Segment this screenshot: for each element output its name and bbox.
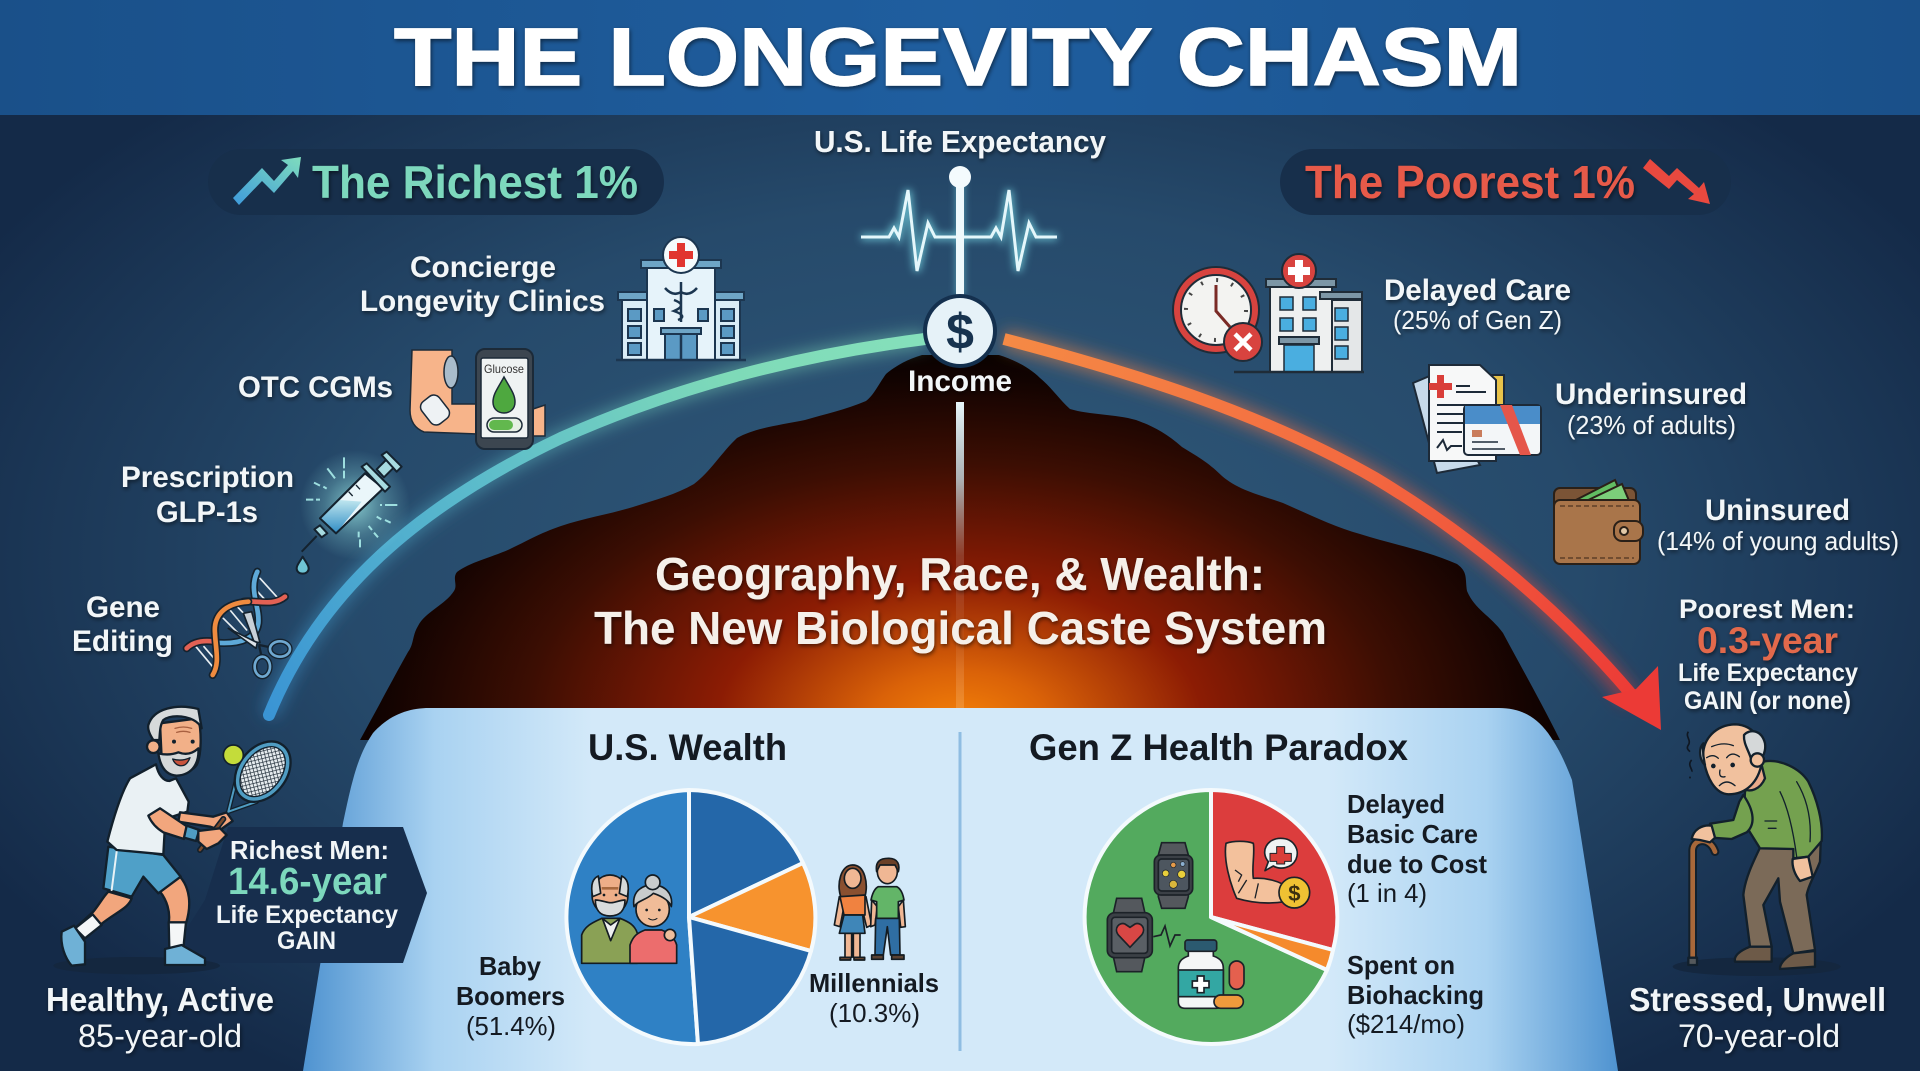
slice: other upper	[689, 790, 803, 917]
callout: poorest men: Life Expectancy	[1678, 659, 1858, 687]
icon: glowing syringe	[297, 450, 410, 574]
icon: income dollar coin	[923, 294, 997, 368]
chasm shape	[360, 355, 1560, 740]
chasm caption: The New Biological Caste System	[594, 602, 1327, 654]
slice: other lower	[689, 917, 811, 1044]
label: gene editing: Editing	[72, 625, 173, 658]
label: spent on biohacking: Biohacking	[1347, 980, 1484, 1010]
icon: clinic hospital	[616, 237, 746, 360]
label: delayed care	[1384, 274, 1571, 335]
panel: lower data panel	[303, 708, 1618, 1071]
hanging hand	[1792, 857, 1813, 881]
icon: clock and hospital	[1173, 254, 1364, 372]
label: spent on biohacking	[1347, 950, 1484, 1039]
pill: poorest	[1280, 149, 1731, 215]
label: spent on biohacking: ($214/mo)	[1347, 1009, 1465, 1039]
neck	[1743, 765, 1765, 790]
label: baby boomers: Baby	[479, 951, 542, 981]
divider	[958, 732, 962, 1051]
label: prescription glp-1s	[121, 461, 294, 529]
label: concierge longevity clinics: Concierge	[410, 251, 556, 284]
heading: u.s. wealth: U.S. Wealth	[588, 727, 787, 768]
heading: gen z health paradox: Gen Z Health Paradox	[1029, 727, 1408, 768]
callout: poorest men: Poorest Men:	[1679, 594, 1855, 624]
label: healthy active: Healthy, Active	[46, 981, 274, 1018]
chasm caption	[594, 548, 1327, 654]
figure: healthy tennis player	[53, 707, 302, 974]
tennis ball	[223, 745, 243, 765]
callout: richest men: Richest Men:	[230, 835, 389, 865]
label: millennials: (10.3%)	[829, 998, 920, 1028]
label: millennials: Millennials	[809, 968, 939, 998]
heading: the richest 1%: The Richest 1%	[312, 156, 638, 208]
label: delayed basic care: Delayed	[1347, 789, 1445, 819]
callout: poorest men	[1678, 594, 1858, 715]
icon: supplement bottle and pills	[1178, 940, 1244, 1008]
label: underinsured: Underinsured	[1555, 378, 1747, 411]
label: delayed basic care: (1 in 4)	[1347, 878, 1427, 908]
label: concierge longevity clinics	[360, 251, 605, 318]
label: delayed basic care: Basic Care	[1347, 819, 1478, 849]
label: uninsured: Uninsured	[1705, 494, 1850, 527]
label: otc cgms: OTC CGMs	[238, 371, 393, 404]
heading: the poorest 1%: The Poorest 1%	[1305, 156, 1635, 208]
back leg	[75, 892, 132, 938]
icon: cgm arm and phone: Glucose	[484, 362, 524, 376]
label: baby boomers: Boomers	[456, 981, 565, 1011]
label: baby boomers: (51.4%)	[466, 1011, 556, 1041]
icon: injured arm with cost: $	[1288, 881, 1300, 906]
chasm caption: Geography, Race, & Wealth:	[655, 548, 1265, 600]
icon: wallet	[1554, 480, 1643, 564]
lower central beam	[956, 402, 964, 710]
label: gene editing: Gene	[86, 591, 160, 624]
shirt	[107, 764, 189, 854]
slice: baby boomers	[566, 790, 698, 1044]
callout: richest men: 14.6-year	[228, 861, 387, 903]
icon: injured arm with cost	[1225, 838, 1310, 908]
icon: boomer couple	[582, 875, 677, 963]
label: concierge longevity clinics: Longevity Clinics	[360, 285, 605, 318]
callout: richest men: GAIN	[277, 927, 336, 955]
label: gene editing	[72, 591, 173, 658]
hand on cane	[1692, 825, 1715, 842]
label: underinsured: (23% of adults)	[1567, 410, 1736, 440]
green rising arc	[269, 339, 925, 715]
shoes	[1735, 947, 1772, 962]
front leg	[160, 877, 189, 923]
icon: heart rate watch	[1107, 898, 1181, 972]
label: millennials	[809, 968, 939, 1028]
callout: poorest men: 0.3-year	[1697, 620, 1838, 661]
label: healthy active	[46, 981, 274, 1054]
head	[1703, 724, 1763, 794]
back arm	[178, 812, 233, 830]
callout: richest men	[165, 827, 427, 963]
front arm	[148, 808, 187, 839]
cane	[1693, 841, 1715, 962]
label: prescription glp-1s: Prescription	[121, 461, 294, 494]
label: underinsured	[1555, 378, 1747, 440]
slice: biohacking majority	[1085, 790, 1327, 1044]
racket frame and handle	[200, 819, 223, 850]
pill: richest	[208, 149, 664, 215]
icon: cgm arm and phone	[410, 349, 545, 449]
label: delayed care: (25% of Gen Z)	[1393, 305, 1562, 335]
icon: income dollar coin: $	[946, 304, 974, 360]
label: delayed basic care: due to Cost	[1347, 849, 1487, 879]
label: healthy active: 85-year-old	[78, 1018, 242, 1054]
heading: u.s. life expectancy: U.S. Life Expectancy	[814, 124, 1107, 159]
icon: heartbeat life line	[861, 166, 1057, 296]
callout: richest men: Life Expectancy	[216, 901, 398, 929]
icon: dna and scissors	[187, 572, 290, 677]
label: spent on biohacking: Spent on	[1347, 950, 1455, 980]
label: stressed unwell: Stressed, Unwell	[1629, 981, 1886, 1018]
slice: delayed care	[1211, 790, 1337, 950]
label: stressed unwell: 70-year-old	[1678, 1018, 1840, 1054]
icon: smartwatch apps	[1154, 843, 1193, 908]
sweater torso	[1743, 761, 1822, 858]
label: delayed care: Delayed Care	[1384, 274, 1571, 307]
icon: millennial couple	[834, 858, 905, 960]
slice: millennials	[689, 863, 815, 951]
red falling arc with arrow	[1004, 339, 1661, 730]
label: baby boomers	[456, 951, 565, 1041]
chart: gen z health pie	[1085, 790, 1337, 1044]
figure: stressed elderly man	[1673, 724, 1841, 976]
shorts	[103, 847, 181, 897]
chart: u.s. wealth pie	[566, 790, 815, 1044]
arm on cane	[1710, 795, 1753, 839]
label: stressed unwell	[1629, 981, 1886, 1054]
icon: insurance papers and card	[1413, 365, 1541, 473]
header banner	[0, 0, 1920, 115]
callout: poorest men: GAIN (or none)	[1684, 687, 1851, 715]
label: delayed basic care	[1347, 789, 1487, 908]
label: prescription glp-1s: GLP-1s	[156, 496, 258, 529]
label: income: Income	[908, 365, 1012, 398]
head	[160, 718, 201, 772]
icon: rising trend arrow	[233, 157, 301, 205]
slice: spent sliver	[1211, 917, 1333, 970]
trousers	[1743, 843, 1821, 953]
title: THE LONGEVITY CHASM	[394, 12, 1522, 103]
icon: falling trend arrow	[1643, 159, 1710, 204]
label: uninsured: (14% of young adults)	[1657, 526, 1899, 556]
label: uninsured	[1657, 494, 1899, 556]
